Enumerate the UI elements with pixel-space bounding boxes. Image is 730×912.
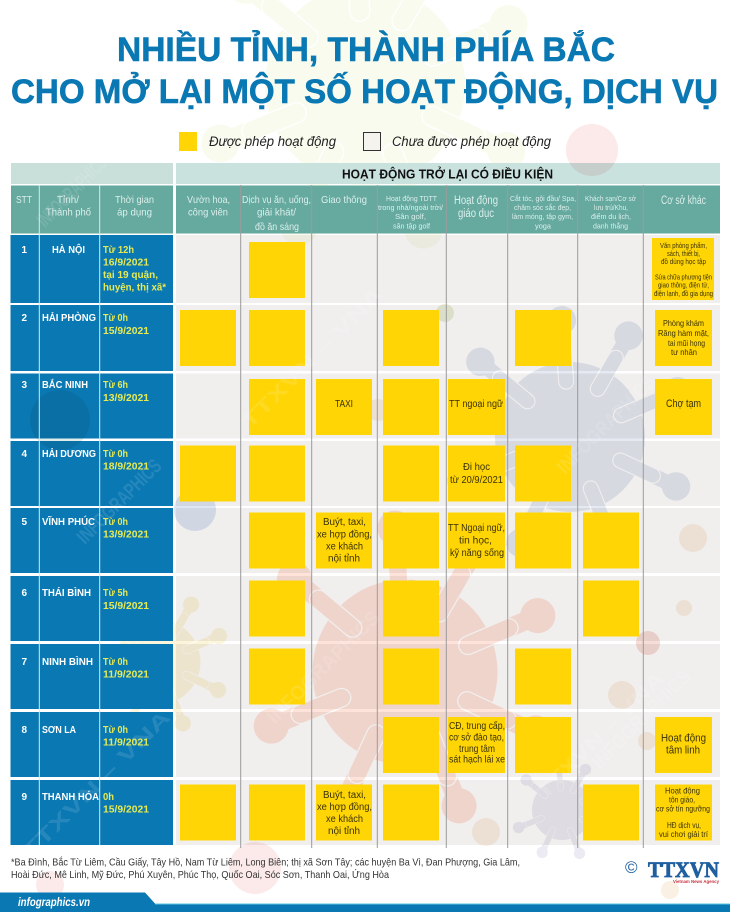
legend: not permitted [364,132,551,150]
background: yellow virus [86,587,230,734]
column headers: áp dụng [117,206,152,218]
row 5 label: VĨNH PHÚC [42,515,95,528]
Bắc Ninh cells [335,398,701,410]
row 1 label: HÀ NỘI [52,243,85,256]
row 7 label: NINH BÌNH [42,655,93,668]
Hà Nội other facilities: đồ dùng học tập [661,257,706,266]
row 8 label: 11/9/2021 [103,736,149,748]
column headers: lưu trú/Khu, [594,203,628,212]
Hải Dương education cell: từ 20/9/2021 [450,475,503,486]
row 4 label: 18/9/2021 [103,460,149,472]
Thanh Hóa transport cell: nội tỉnh [328,825,360,837]
column headers: yoga [535,222,552,230]
table header bars [11,163,720,234]
Sơn La education cell: cơ sở đào tạo, [449,732,504,744]
Bắc Ninh cells: Chợ tạm [666,398,701,410]
row 9 label [22,790,149,816]
logo: TTXVN copyright: © [625,858,638,877]
title: CHO MỞ LẠI MỘT SỐ HOẠT ĐỘNG, DỊCH VỤ [11,72,718,111]
row 1 label: tại 19 quận, [103,269,158,281]
Sơn La other facilities [661,732,706,756]
Thanh Hóa other facilities: HĐ dịch vụ, [667,820,701,830]
Hà Nội other facilities: Sửa chữa phương tiện [655,272,712,282]
row 8 label: Từ 0h [103,724,128,736]
row 2 label: 2 [22,313,28,324]
column headers: Vườn hoa, [187,194,230,206]
Hải Phòng other facilities: tư nhân [671,347,697,357]
column headers: đồ ăn sáng [255,221,299,233]
Vĩnh Phúc education cell [448,523,505,559]
row 7 label: 7 [22,657,28,668]
row 6 squares [249,580,639,636]
row 6 label: THÁI BÌNH [42,586,91,599]
Hà Nội other facilities: điện lạnh, đồ gia dụng [654,289,713,298]
row 2 label: 15/9/2021 [103,325,149,337]
Hải Dương education cell [450,462,503,486]
watermarks: TTXVN – VNA [533,668,669,804]
Sơn La education cell [449,720,505,766]
column headers: làm móng, tập gym, [512,212,573,221]
column headers: giải khát/ [257,206,296,218]
row 9 label: 0h [103,791,114,803]
row 9 label: 9 [22,792,28,803]
Hà Nội other facilities [654,241,713,298]
watermarks: INFOGRAPHICS [263,607,385,729]
row 3 label: BẮC NINH [42,378,88,391]
column headers: chăm sóc sắc đẹp, [514,203,571,212]
column headers: giáo dục [458,208,494,220]
row 8 label: 8 [22,725,28,736]
Thanh Hóa other facilities: vui chơi giải trí [659,829,709,839]
watermarks: INFOGRAPHICS [553,371,660,479]
Hải Dương education cell: Đi học [463,462,490,473]
column dividers [241,185,643,848]
column headers: Khách sạn/Cơ sở [585,194,636,203]
column headers: Cắt tóc, gội đầu/ Spa, [510,194,576,203]
title: NHIỀU TỈNH, THÀNH PHÍA BẮC [117,31,615,69]
column headers: Cơ sở khác [661,195,706,207]
row 8 squares [383,717,712,773]
Bắc Ninh cells: TT ngoại ngữ [449,399,503,410]
Hải Phòng other facilities: tai mũi họng [668,338,705,348]
Hà Nội other facilities: giao thông, điện tử, [658,280,709,290]
row 3 label: 13/9/2021 [103,392,149,404]
legend [179,132,551,151]
row 2 label: HẢI PHÒNG [42,311,96,324]
row 7 label: 11/9/2021 [103,668,149,680]
Vĩnh Phúc transport cell: Buýt, taxi, [323,517,366,528]
row labels: number, province, date [22,243,167,816]
row 1 label: 16/9/2021 [103,256,149,268]
column headers: Giao thông [321,194,367,206]
row 3 label [22,378,149,404]
watermarks: TTXVN – VNA [18,707,175,864]
Hải Phòng other facilities [658,318,709,357]
row 7 label: Từ 0h [103,656,128,668]
row 1 label: Từ 12h [103,244,134,256]
activity rows background [176,235,720,845]
row 5 label: 5 [22,517,28,528]
Vĩnh Phúc transport cell: xe khách [326,542,363,552]
background: pale green virus behind title [196,0,534,254]
row 5 label: Từ 0h [103,516,128,528]
row 5 label: 13/9/2021 [103,528,149,540]
column headers [16,194,706,233]
Thanh Hóa transport cell: xe khách [326,814,363,825]
column headers: Hoạt động [454,195,498,207]
column headers: Dịch vụ ăn, uống, [242,194,311,206]
footnote: Hoài Đức, Mê Linh, Mỹ Đức, Phú Xuyên, Phúc Thọ, Quốc Oai, Sóc Sơn, Thanh Oai, Ứng Hòa [11,868,389,881]
footer band with website [0,892,730,912]
row 6 label: 15/9/2021 [103,600,149,612]
row 8 label [22,724,149,748]
background: red virus [248,509,561,829]
row 5 squares [249,512,639,568]
column headers: Thành phố [46,206,91,218]
row 4 label: Từ 0h [103,448,128,460]
logo: TTXVN copyright: TTXVN [648,857,719,882]
Hải Phòng other facilities: Phòng khám [663,318,704,328]
text inside yellow squares [317,241,713,839]
row 2 label: Từ 0h [103,312,128,324]
watermarks [18,152,695,864]
Hải Phòng other facilities: Răng hàm mặt, [658,328,709,338]
Thanh Hóa other facilities [656,786,710,839]
row 7 label [22,655,149,680]
row 9 squares [180,784,712,840]
Hà Nội other facilities: sách, thiết bị, [667,249,700,258]
Sơn La education cell: sát hạch lái xe [449,754,505,766]
watermarks: INFOGRAPHICS [33,152,112,232]
logo: TTXVN copyright [625,857,719,884]
Sơn La other facilities: tâm linh [666,744,700,756]
row 8 label: SƠN LA [42,725,76,736]
legend: permitted [179,132,336,151]
row 9 label: 15/9/2021 [103,804,149,816]
logo: TTXVN copyright: Vietnam News Agency [673,879,719,884]
row 2 label [22,311,149,337]
row 6 label: Từ 5h [103,587,128,599]
row 4 label: 4 [22,449,28,460]
row 4 squares [180,446,571,502]
table heading: HOẠT ĐỘNG TRỞ LẠI CÓ ĐIỀU KIỆN [342,166,553,182]
Sơn La education cell: CĐ, trung cấp, [449,720,505,732]
row 1 label: huyện, thị xã* [103,282,167,294]
footer band with website: infographics.vn [18,895,90,909]
row 7 squares [249,648,571,704]
legend: not permitted: Chưa được phép hoạt động [392,134,551,149]
background: blue virus [443,305,696,564]
column headers: Thời gian [115,194,154,206]
row 9 label: THANH HÓA [42,790,99,803]
column headers: trong nhà/ngoài trời/ [378,203,444,212]
row 6 label [22,586,149,612]
Thanh Hóa other facilities: cơ sở tín ngưỡng [656,804,710,814]
Thanh Hóa other facilities: Hoạt động [665,786,700,796]
column headers: Tỉnh/ [57,194,79,206]
watermarks: INFOGRAPHICS [588,666,695,774]
row 5 label [22,515,149,540]
Vĩnh Phúc education cell: kỹ năng sống [450,547,504,559]
row 1 label [22,243,167,294]
column headers: Hoạt động TDTT [386,194,437,203]
column headers: Sân golf, [395,212,426,221]
watermarks: INFOGRAPHICS [73,455,166,549]
yellow squares: permitted activities [180,238,714,840]
Thanh Hóa transport cell: Buýt, taxi, [323,790,366,801]
Vĩnh Phúc transport cell: xe hợp đồng, [317,528,372,540]
Vĩnh Phúc transport cell [317,517,372,564]
Thanh Hóa other facilities: tôn giáo, [669,794,695,804]
row 4 label: HẢI DƯƠNG [42,447,96,460]
column headers: danh thắng [593,222,628,230]
column headers: STT [16,194,32,206]
Sơn La education cell: trung tâm [459,744,495,755]
Hà Nội other facilities: Văn phòng phẩm, [660,241,707,250]
row 2 squares [180,310,712,366]
row 1 label: 1 [22,245,28,256]
Thanh Hóa transport cell [317,790,372,837]
background: purple virus [511,757,613,861]
row 4 label [22,447,149,472]
row 3 label: 3 [22,380,28,391]
legend: permitted: Được phép hoạt động [209,134,336,149]
province cells: blue column block [10,235,173,845]
Vĩnh Phúc education cell: tin học, [459,536,492,546]
Thanh Hóa transport cell: xe hợp đồng, [317,801,372,813]
row 1 squares [249,238,714,300]
background: decorative circles [30,124,707,899]
column headers: công viên [188,206,228,218]
Bắc Ninh cells: TAXI [335,399,353,410]
column headers: điểm du lịch, [591,212,631,221]
Vĩnh Phúc transport cell: nội tỉnh [328,552,360,564]
row 3 squares [249,379,712,435]
row 3 label: Từ 6h [103,379,128,391]
footnote: *Ba Đình, Bắc Từ Liêm, Cầu Giấy, Tây Hồ, Nam Từ Liêm, Long Biên; thị xã Sơn Tây; các huyện Ba Vì, Đan Phượng, Gia Lâm, [11,856,520,868]
row 6 label: 6 [22,588,28,599]
column headers: sân tập golf [393,222,431,230]
watermarks: TTXVN – VNA [238,284,388,434]
footnote [11,856,520,881]
title [11,31,718,111]
Sơn La other facilities: Hoạt động [661,732,706,744]
Vĩnh Phúc education cell: TT Ngoại ngữ, [448,523,505,534]
